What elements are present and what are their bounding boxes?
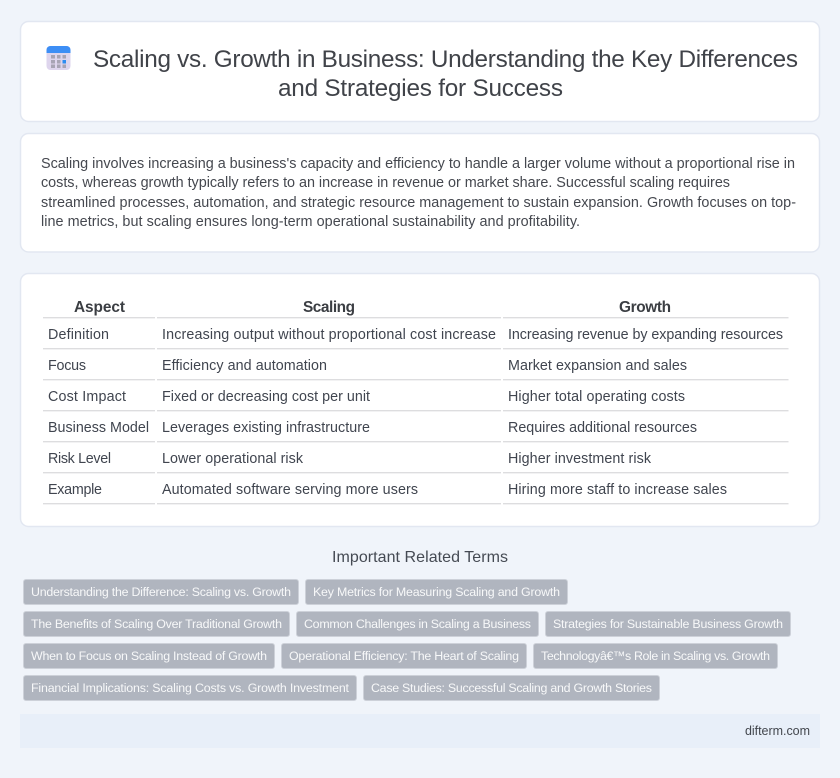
panel: comparison table <box>20 274 820 526</box>
row: cost impact <box>48 389 685 405</box>
chip row 3: When to Focus on Scaling Instead of Growth <box>31 649 267 663</box>
row: example: Automated software serving more users <box>162 482 418 498</box>
chip row 3 <box>24 644 778 668</box>
chip row 3: Technologyâ€™s Role in Scaling vs. Growth <box>541 649 770 663</box>
row: cost impact: Cost Impact <box>48 389 126 405</box>
panel: introduction text: costs, whereas growth typically refers to an increase in revenue or market share. Successful scaling requires <box>41 175 730 191</box>
row: example: Hiring more staff to increase sales <box>508 482 727 498</box>
chip row 1: Key Metrics for Measuring Scaling and Growth <box>313 585 560 599</box>
row: business model: Requires additional resources <box>508 420 697 436</box>
row: focus: Market expansion and sales <box>508 358 687 374</box>
row: example: Example <box>48 482 102 498</box>
row: cost impact: Fixed or decreasing cost per unit <box>162 389 370 405</box>
chip row 2: Common Challenges in Scaling a Business <box>304 617 531 631</box>
row: definition: Increasing revenue by expanding resources <box>508 327 783 343</box>
row: focus: Efficiency and automation <box>162 358 327 374</box>
title <box>93 46 798 102</box>
row: definition: Increasing output without proportional cost increase <box>162 327 496 343</box>
chip row 4 <box>24 676 660 700</box>
icon: calendar <box>46 46 70 70</box>
row: cost impact: Higher total operating costs <box>508 389 685 405</box>
panel: introduction text <box>20 134 820 252</box>
row: risk level: Risk Level <box>48 451 111 467</box>
row: business model: Business Model <box>48 420 149 436</box>
panel: introduction text: streamlined processes, automation, and strategic resource management to sustain expansion. Growth focuses on top- <box>41 195 796 211</box>
table header: Scaling <box>303 299 355 316</box>
table header: Growth <box>619 299 671 316</box>
chip row 3: Operational Efficiency: The Heart of Scaling <box>289 649 519 663</box>
row: definition <box>48 327 783 343</box>
chip row 2: The Benefits of Scaling Over Traditional Growth <box>31 617 282 631</box>
chip row 1 <box>24 580 568 604</box>
row: risk level: Lower operational risk <box>162 451 304 467</box>
chip row 1: Understanding the Difference: Scaling vs. Growth <box>31 585 291 599</box>
row: focus: Focus <box>48 358 86 374</box>
table header <box>74 299 671 316</box>
panel: introduction text: Scaling involves increasing a business's capacity and efficiency to handle a larger volume without a proportional rise in <box>41 156 795 172</box>
chip row 2 <box>24 612 790 636</box>
row: focus <box>48 358 687 374</box>
footer: difterm.com <box>745 724 810 738</box>
footer <box>20 714 820 748</box>
row: definition: Definition <box>48 327 109 343</box>
related term chips <box>24 580 790 700</box>
row: example <box>48 482 727 498</box>
title: and Strategies for Success <box>278 75 563 102</box>
row: business model <box>48 420 697 436</box>
row: risk level: Higher investment risk <box>508 451 652 467</box>
heading: important related terms: Important Related Terms <box>332 549 508 566</box>
title: Scaling vs. Growth in Business: Understanding the Key Differences <box>93 46 798 73</box>
row: risk level <box>48 451 652 467</box>
row: business model: Leverages existing infrastructure <box>162 420 370 436</box>
chip row 4: Case Studies: Successful Scaling and Growth Stories <box>371 681 652 695</box>
chip row 4: Financial Implications: Scaling Costs vs. Growth Investment <box>31 681 350 695</box>
table header: Aspect <box>74 299 125 316</box>
panel: title header <box>20 22 820 122</box>
panel: introduction text: line metrics, but scaling ensures long-term operational sustainability and profitability. <box>41 214 580 230</box>
chip row 2: Strategies for Sustainable Business Growth <box>553 617 783 631</box>
